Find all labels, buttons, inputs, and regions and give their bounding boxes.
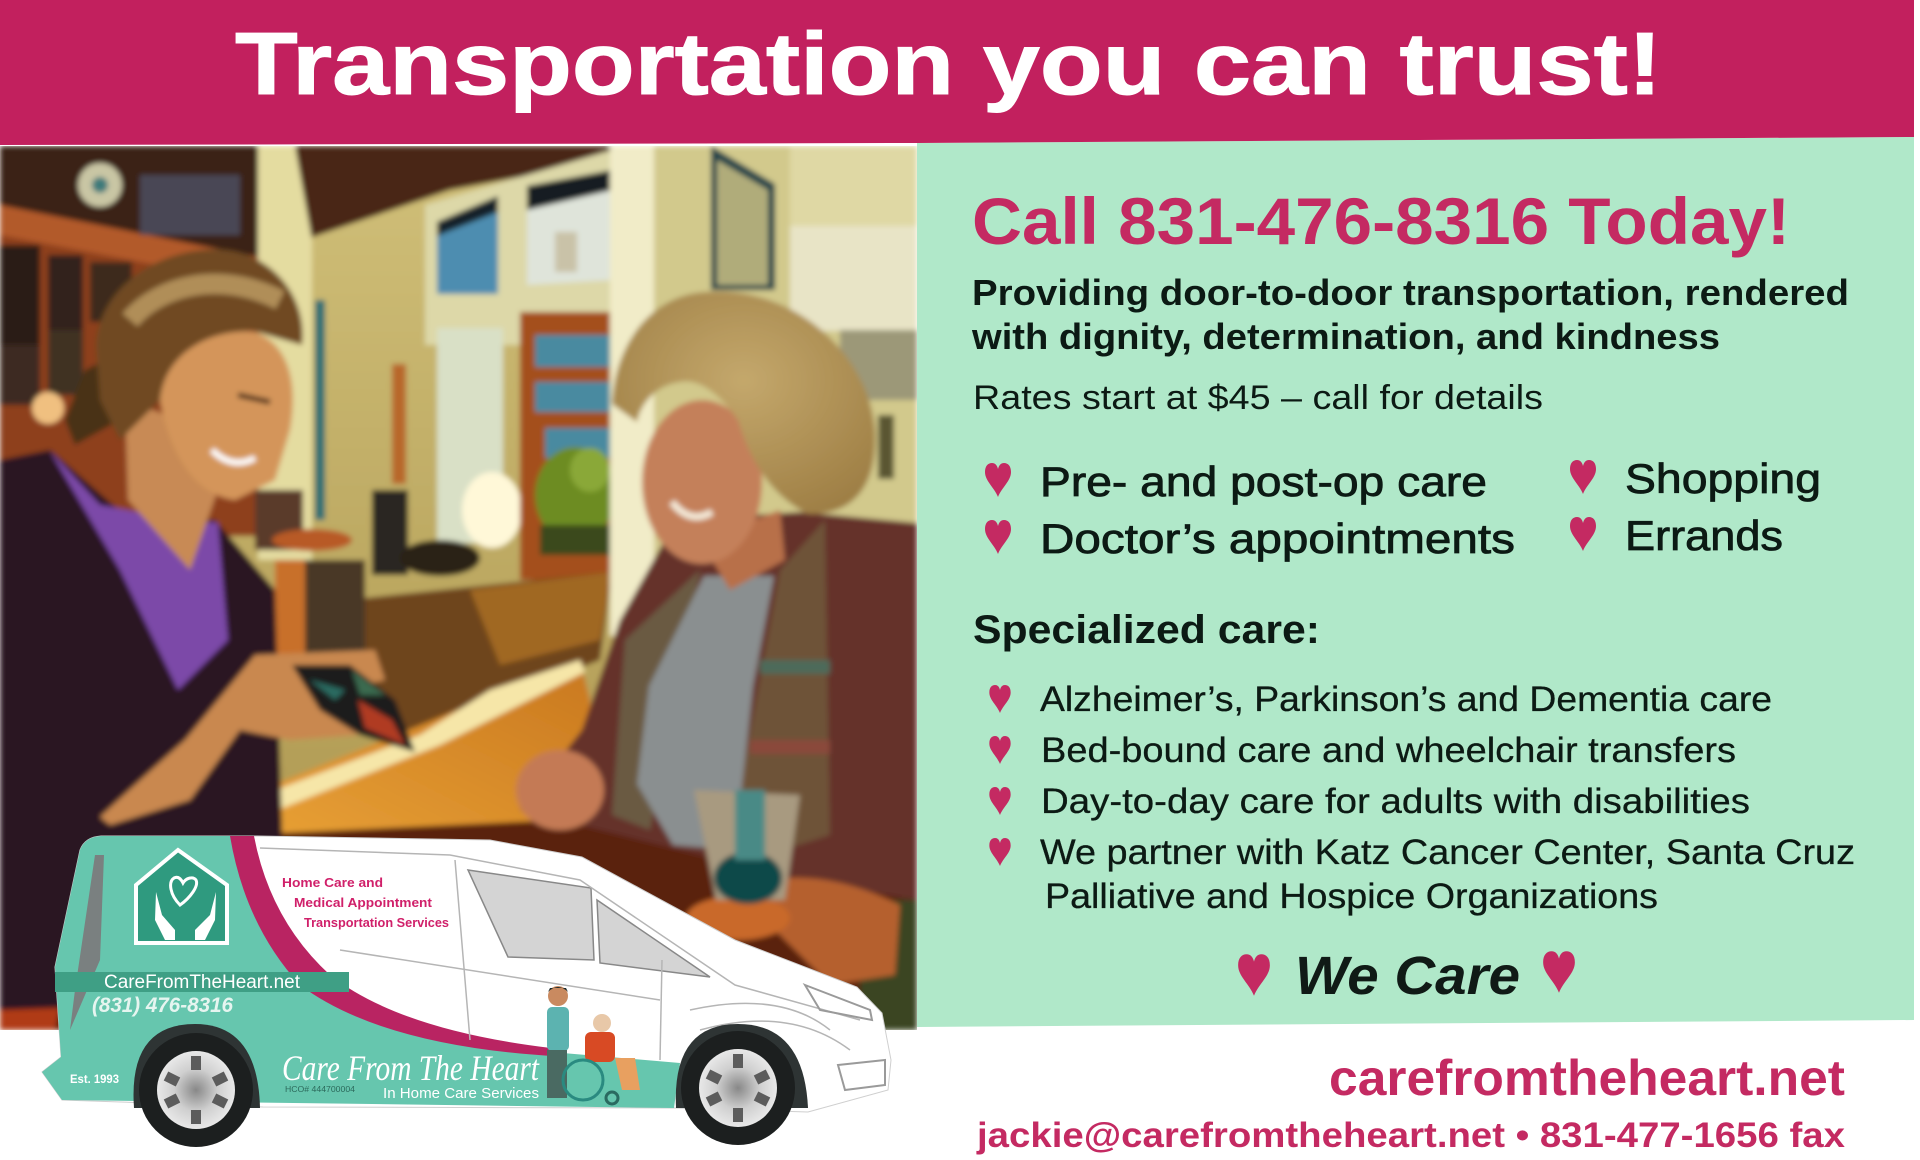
service list: Doctor’s appointments bbox=[1040, 515, 1515, 562]
van brand name: Care From The Heart bbox=[282, 1048, 540, 1088]
logo: house with heart and hands bbox=[136, 850, 227, 943]
we care line: We Care bbox=[1295, 946, 1520, 1006]
teal rear livery bbox=[42, 836, 680, 1108]
van established date: Est. 1993 bbox=[70, 1072, 119, 1086]
column behind woman bbox=[258, 146, 312, 560]
window frame bbox=[425, 150, 612, 345]
panel: mint information panel bbox=[917, 137, 1914, 1027]
arm and hand bbox=[100, 650, 385, 825]
framed picture bbox=[711, 146, 775, 290]
table bbox=[237, 660, 590, 840]
blonde hair bbox=[612, 291, 875, 514]
service list: Errands bbox=[1625, 512, 1783, 559]
right hand bbox=[770, 878, 900, 985]
dark table foreground bbox=[0, 820, 917, 1030]
email and fax: jackie@carefromtheheart.net • 831-477-1656 fax bbox=[976, 1116, 1846, 1155]
ponytail bbox=[65, 350, 125, 445]
curtain bbox=[437, 328, 503, 543]
website: carefromtheheart.net bbox=[1329, 1050, 1845, 1106]
branded van bbox=[42, 836, 891, 1147]
van subtitle: In Home Care Services bbox=[383, 1085, 539, 1102]
stained glass object bbox=[292, 665, 415, 752]
van body bbox=[42, 836, 891, 1112]
neck and chest bbox=[125, 400, 235, 570]
service list: Pre- and post-op care bbox=[1040, 458, 1487, 505]
specialized care list bbox=[989, 680, 1855, 916]
floor bbox=[365, 572, 612, 740]
service list bbox=[985, 455, 1821, 562]
title text: Transportation you can trust! bbox=[235, 14, 1662, 113]
specialized care list: Palliative and Hospice Organizations bbox=[1045, 877, 1658, 916]
blue wall stripe bbox=[315, 300, 325, 520]
hair bbox=[96, 250, 303, 440]
right wall bbox=[654, 146, 917, 566]
rear door edge bbox=[70, 855, 104, 1030]
photo: caregiver and elderly client in a home bbox=[0, 146, 917, 1030]
specialized care heading: Specialized care: bbox=[973, 608, 1320, 652]
tagline bbox=[971, 272, 1849, 357]
van licence number: HCO# 444700004 bbox=[285, 1085, 356, 1094]
wooden door bbox=[520, 312, 612, 580]
plant bbox=[535, 447, 615, 543]
web address stripe bbox=[55, 972, 349, 992]
front wheel bbox=[676, 1024, 808, 1145]
ceiling bbox=[295, 146, 612, 238]
magenta swoosh bbox=[230, 836, 551, 1056]
rates note: Rates start at $45 – call for details bbox=[973, 379, 1543, 417]
white door post bbox=[610, 146, 654, 636]
woman left: cardigan bbox=[0, 450, 282, 1010]
body panel lines bbox=[260, 848, 860, 1060]
icon: caregiver pushing wheelchair bbox=[547, 986, 640, 1104]
rear wheel bbox=[134, 1024, 260, 1147]
van web address: CareFromTheHeart.net bbox=[104, 972, 301, 993]
side windows bbox=[468, 870, 710, 977]
call to action heading: Call 831-476-8316 Today! bbox=[972, 184, 1790, 258]
we care line bbox=[1238, 946, 1575, 1006]
specialized care list: Day-to-day care for adults with disabilities bbox=[1041, 782, 1750, 821]
tagline: with dignity, determination, and kindness bbox=[971, 316, 1720, 357]
van service text: Medical Appointment bbox=[294, 896, 433, 910]
drinking glass bbox=[686, 790, 800, 940]
specialized care list: Bed-bound care and wheelchair transfers bbox=[1041, 731, 1736, 770]
van service text: Transportation Services bbox=[304, 916, 449, 930]
specialized care list: Alzheimer’s, Parkinson’s and Dementia care bbox=[1040, 680, 1772, 719]
van service text: Home Care and bbox=[282, 876, 383, 890]
older woman: shawl bbox=[520, 512, 917, 900]
service list: Shopping bbox=[1625, 455, 1821, 502]
hair highlights bbox=[130, 284, 280, 320]
raised hand bbox=[516, 750, 604, 830]
face bbox=[642, 400, 762, 564]
tagline: Providing door-to-door transportation, rendered bbox=[972, 272, 1849, 313]
van service text bbox=[282, 876, 449, 930]
van phone: (831) 476-8316 bbox=[92, 994, 233, 1017]
specialized care list: We partner with Katz Cancer Center, Santa Cruz bbox=[1040, 833, 1855, 872]
neck bbox=[700, 510, 785, 590]
title band bbox=[0, 0, 1914, 145]
face bbox=[160, 332, 293, 500]
headlight and grille bbox=[805, 985, 885, 1090]
bookshelf bbox=[0, 146, 262, 536]
orange wall panel and clutter bbox=[392, 364, 406, 484]
grey top bbox=[637, 576, 774, 850]
purple blouse bbox=[50, 451, 228, 690]
